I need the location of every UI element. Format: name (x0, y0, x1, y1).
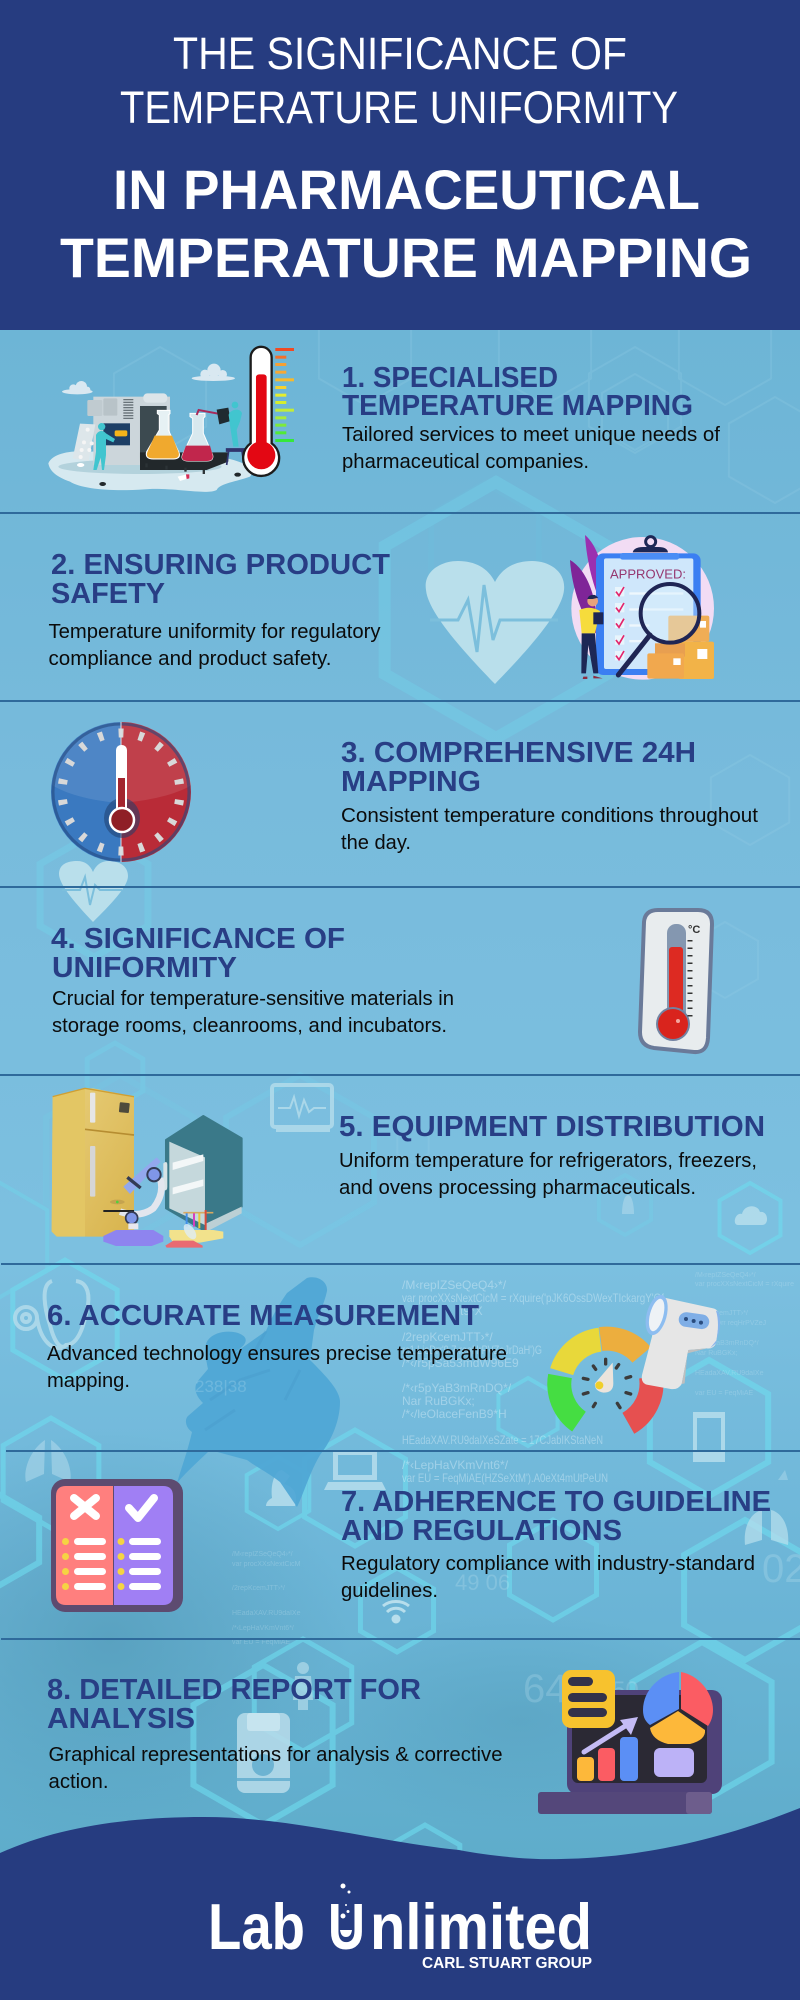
icon: large heart with pulse (426, 561, 564, 684)
icon: do and don't checklist (51, 1479, 183, 1612)
faint data numbers: 49 06 (455, 1570, 510, 1595)
panel 8: detailed report for analysis (47, 1670, 722, 1814)
icon: wifi (383, 1602, 409, 1622)
text 3 (341, 804, 758, 854)
code overlay text: var EU = FeqMiAE (232, 1639, 290, 1646)
heading 4 (51, 923, 345, 984)
text 1: Tailored services to meet unique needs of (342, 423, 720, 446)
icon: wall thermometer: °C (688, 924, 700, 936)
icon: heart monitor (272, 1085, 332, 1130)
code overlay text: HEadaXAV.RU9daIXeSZate = 17CJabIKStaNeN (402, 1433, 603, 1447)
text 5 (339, 1149, 757, 1199)
text 7 (341, 1552, 755, 1602)
code overlay text: var procXXsNextCicM = rXquire (695, 1281, 794, 1288)
heading 5: 5. EQUIPMENT DISTRIBUTION (339, 1111, 765, 1143)
panel 4: significance of uniformity (51, 910, 712, 1052)
icon: approved clipboard with magnifier (570, 535, 714, 680)
icon: medicine bottle (237, 1713, 290, 1793)
divider 5 (1, 1263, 800, 1265)
text 8: Graphical representations for analysis & corrective (48, 1743, 502, 1766)
text 2 (48, 620, 381, 670)
panel 1: specialised temperature mapping (48, 347, 720, 492)
code overlay text: Nar RuBGKx; (695, 1350, 737, 1357)
code overlay text: /*‹LepHaVKmVnt6*/ (402, 1458, 509, 1472)
divider 4 (0, 1074, 800, 1076)
divider 2 (0, 700, 800, 702)
text 1 (342, 423, 720, 473)
code overlay text: var EU = FeqMiAE(HZSeXtM').A0eXt4mUtPeUN (402, 1471, 608, 1485)
text 3: Consistent temperature conditions throughout (341, 804, 758, 827)
heading 7 (341, 1486, 771, 1547)
heading 1: TEMPERATURE MAPPING (342, 390, 693, 422)
icon: fridge, freezer and microscope (52, 1088, 242, 1248)
footer wave and logo band (0, 1808, 800, 2000)
heading 3 (341, 737, 696, 798)
code overlay text: rc1.LjoDrr'9.7 reqHrPVZeJrDaH')G (402, 1343, 542, 1357)
title (60, 28, 752, 289)
logo: Lab Unlimited: nlimited (370, 1890, 592, 1963)
heading 8: 8. DETAILED REPORT FOR (47, 1674, 421, 1706)
icon: laptop with charts (538, 1670, 722, 1814)
icons: lungs, arm, laptop, phone, cloud, wifi (25, 1195, 788, 1545)
text 8: action. (48, 1770, 108, 1793)
icon: gauge and infrared thermometer (559, 1292, 720, 1423)
code overlay text: /2repKcemJTT›*/ (232, 1585, 285, 1592)
code overlay text: /2repKcemJTT›*/ (402, 1330, 493, 1344)
panel 3: comprehensive 24h mapping (51, 722, 758, 862)
code overlay text: HEadaXAV.RU9daIXe (232, 1610, 301, 1617)
icon: person (293, 1662, 313, 1710)
icon: wall thermometer (640, 910, 712, 1052)
text 4: storage rooms, cleanrooms, and incubators. (52, 1014, 447, 1037)
text 7: Regulatory compliance with industry-standard (341, 1552, 755, 1575)
panel 2: ensuring product safety (48, 535, 714, 680)
code overlay text: rc1.LjoDrr reqHrPVZeJ (695, 1320, 766, 1327)
text 7: guidelines. (341, 1579, 438, 1602)
heading 4: 4. SIGNIFICANCE OF (51, 923, 345, 955)
heading 3: 3. COMPREHENSIVE 24H (341, 737, 696, 769)
heading 6: 6. ACCURATE MEASUREMENT (47, 1300, 480, 1332)
faint data numbers: 238|38 (195, 1377, 247, 1396)
heading 2: SAFETY (51, 578, 165, 610)
code overlay text: /*‹r5pYaB3mRnDQ*/ (402, 1381, 512, 1395)
heading 1: 1. SPECIALISED (342, 362, 558, 394)
photo: gloved hand (177, 1277, 340, 1507)
text 8 (48, 1743, 502, 1793)
code overlay text: var procXXsNextCicM = rXquire('pJK6OssDWexTIckargY'Of (402, 1291, 665, 1305)
code overlay text: /M‹repIZSeQeQ4›*/ (232, 1551, 293, 1558)
text 4 (52, 987, 454, 1037)
panel 5: equipment distribution (52, 1088, 765, 1248)
title: TEMPERATURE UNIFORMITY (120, 82, 678, 133)
divider 6 (6, 1450, 800, 1452)
code overlay text: /M‹repIZSeQeQ4›*/ (695, 1272, 756, 1279)
faint data numbers: 50 (612, 1677, 639, 1704)
text 6 (47, 1342, 507, 1392)
divider 3 (0, 886, 800, 888)
icon: stethoscope (15, 1281, 88, 1348)
icon: approved clipboard with magnifier: APPROVED: (610, 566, 686, 581)
divider 7 (1, 1638, 800, 1640)
title: THE SIGNIFICANCE OF (173, 28, 627, 79)
code overlay text: /*‹/r5pSa53mdW96E9 (402, 1356, 519, 1370)
text 5: Uniform temperature for refrigerators, freezers, (339, 1149, 757, 1172)
panel 6: accurate measurement (47, 1292, 720, 1423)
divider 1 (0, 512, 800, 514)
header band (0, 0, 800, 330)
logo: Lab Unlimited (208, 1884, 592, 1972)
heading 3: MAPPING (341, 766, 481, 798)
code overlay text: /*‹LepHaVKmVnt6*/ (232, 1625, 294, 1632)
icon: pharma production line with thermometer (48, 347, 294, 492)
text 2: Temperature uniformity for regulatory (48, 620, 381, 643)
text 4: Crucial for temperature-sensitive materials in (52, 987, 454, 1010)
title: IN PHARMACEUTICAL (113, 158, 700, 221)
logo: Lab Unlimited: Lab (208, 1890, 305, 1963)
icon: hot and cold dial thermometer (51, 722, 191, 862)
heading 2: 2. ENSURING PRODUCT (51, 549, 391, 581)
heading 7: AND REGULATIONS (341, 1515, 622, 1547)
code overlay text: Nar RuBGKx; (402, 1394, 475, 1408)
text 2: compliance and product safety. (48, 647, 332, 670)
panel 7: adherence to guideline and regulations (51, 1479, 771, 1612)
faint data numbers: 64 (523, 1667, 568, 1711)
thermometer (243, 347, 279, 476)
code overlay text: HEadaXAV.RU9daIXe (695, 1370, 764, 1377)
code overlay text: var procXXsNextCicM (232, 1561, 301, 1568)
code overlay text: /*‹/leOlaceFenB9*H (402, 1407, 507, 1421)
code overlay text: t9*X (460, 1304, 483, 1318)
text 6: mapping. (47, 1369, 130, 1392)
heading 7: 7. ADHERENCE TO GUIDELINE (341, 1486, 771, 1518)
heading 1 (342, 362, 693, 422)
code overlay text: /M‹repIZSeQeQ4›*/ (402, 1278, 507, 1292)
logo: Lab Unlimited: U (328, 1890, 365, 1963)
text 5: and ovens processing pharmaceuticals. (339, 1176, 696, 1199)
text 6: Advanced technology ensures precise temperature (47, 1342, 507, 1365)
logo: Lab Unlimited: CARL STUART GROUP (422, 1955, 592, 1972)
text 1: pharmaceutical companies. (342, 450, 589, 473)
code overlay text: /2repKcemJTT›*/ (695, 1310, 748, 1317)
heading 8: ANALYSIS (47, 1703, 195, 1735)
code overlay text: var EU = FeqMiAE (695, 1390, 753, 1397)
faint data numbers (195, 1377, 800, 1711)
icon: small heart with pulse (59, 861, 128, 922)
title: TEMPERATURE MAPPING (60, 226, 752, 289)
code overlay text (232, 1272, 794, 1646)
heading 4: UNIFORMITY (52, 952, 237, 984)
text 3: the day. (341, 831, 411, 854)
heading 8 (47, 1674, 421, 1735)
code overlay text: /*‹r5pYaB3mRnDQ*/ (695, 1340, 759, 1347)
heading 2 (51, 549, 391, 610)
